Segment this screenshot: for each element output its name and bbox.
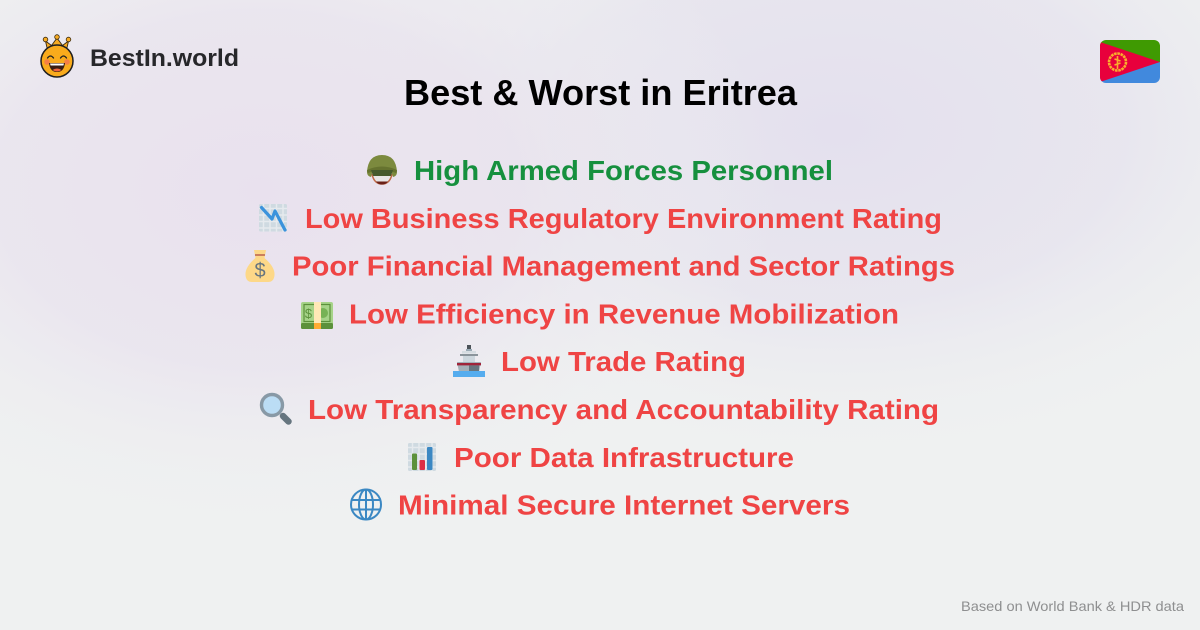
list item: Low Efficiency in Revenue Mobilization: Low Efficiency in Revenue Mobilization bbox=[349, 298, 899, 329]
list item: High Armed Forces Personnel: High Armed Forces Personnel bbox=[414, 155, 833, 186]
list item: Low Business Regulatory Environment Rating: Low Business Regulatory Environment Rating bbox=[305, 203, 942, 234]
flag of Eritrea bbox=[1100, 40, 1160, 83]
list item: Low Transparency and Accountability Rating: Low Transparency and Accountability Rating bbox=[308, 394, 939, 425]
list item: Poor Data Infrastructure: Poor Data Infrastructure bbox=[454, 442, 794, 473]
icon: banknotes bbox=[301, 302, 333, 329]
icon: bar chart bbox=[408, 443, 436, 471]
logo: BestIn.world bbox=[41, 35, 239, 77]
icon: chart decreasing bbox=[259, 204, 287, 232]
icon: magnifying glass bbox=[262, 394, 288, 422]
footer: data source: Based on World Bank & HDR data bbox=[961, 598, 1184, 614]
icon: money bag: $ bbox=[254, 260, 266, 282]
icon: crowned smiling face bbox=[41, 35, 73, 77]
list item: Minimal Secure Internet Servers: Minimal Secure Internet Servers bbox=[398, 490, 850, 521]
icon: banknotes: $ bbox=[305, 306, 313, 321]
brand name: BestIn.world bbox=[90, 45, 239, 72]
icon: globe bbox=[351, 490, 381, 520]
icon: ship bbox=[453, 345, 485, 377]
icon: money bag bbox=[245, 250, 275, 282]
icon: military helmet bbox=[367, 155, 397, 184]
list item: Poor Financial Management and Sector Ratings: Poor Financial Management and Sector Ratings bbox=[292, 251, 955, 282]
list item: Low Trade Rating: Low Trade Rating bbox=[501, 346, 746, 377]
title: Best & Worst in Eritrea bbox=[404, 72, 798, 113]
